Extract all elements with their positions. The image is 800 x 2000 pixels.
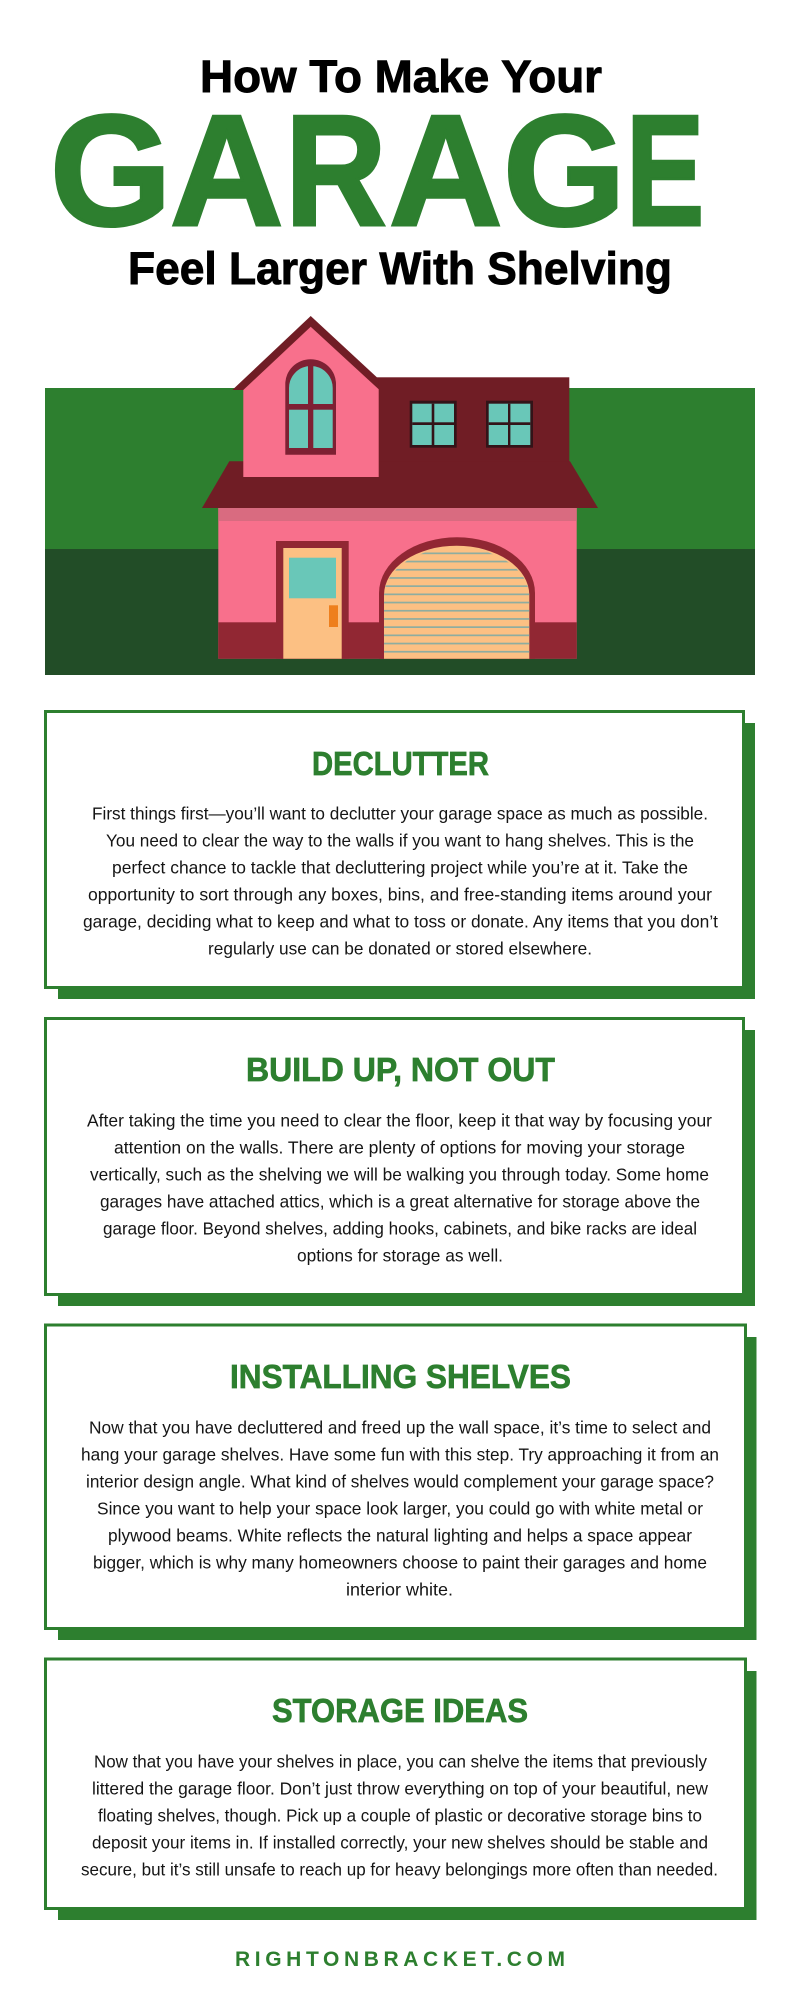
text block: declutter: First things first—you’ll want to declutter your garage space as much as possible. <box>92 803 708 823</box>
icon: dormer window right <box>486 401 533 448</box>
panel: storage ideas <box>46 1659 756 1920</box>
text block: build up, not out: options for storage as well. <box>297 1245 503 1265</box>
text block: storage ideas: secure, but it’s still unsafe to reach up for heavy belongings more often than needed. <box>81 1859 718 1879</box>
title word: GARAGE: R <box>285 83 387 259</box>
upper gable <box>232 316 379 477</box>
text block: storage ideas: Now that you have your shelves in place, you can shelve the items that previously <box>94 1751 707 1771</box>
background: green wall <box>45 388 755 549</box>
text block: declutter: regularly use can be donated or stored elsewhere. <box>208 938 592 958</box>
text block: storage ideas: floating shelves, though. Pick up a couple of plastic or decorative storage bins to <box>98 1805 702 1825</box>
heading: build up, not out: BUILD UP, NOT OUT <box>246 1051 555 1088</box>
text block: installing shelves <box>81 1417 719 1599</box>
heading: declutter: DECLUTTER <box>312 745 489 782</box>
text block: declutter <box>83 803 718 958</box>
page graphics <box>44 316 756 1966</box>
title <box>50 51 704 294</box>
title word: GARAGE <box>50 83 704 259</box>
title line: Feel Larger With Shelving: Feel Larger With Shelving <box>128 243 672 294</box>
text block: storage ideas: littered the garage floor. Don’t just throw everything on top of your beautiful, new <box>92 1778 708 1798</box>
title line: How To Make Your: How To Make Your <box>200 51 602 102</box>
title word: GARAGE: E <box>626 83 704 259</box>
text block: installing shelves: bigger, which is why many homeowners choose to paint their garages and home <box>93 1552 707 1572</box>
text block: installing shelves: interior design angle. What kind of shelves would complement your garage space? <box>86 1471 714 1491</box>
text block: declutter: garage, deciding what to keep and what to toss or donate. Any items that you don’t <box>83 911 718 931</box>
icon: dormer window left <box>410 401 457 448</box>
text block: installing shelves: hang your garage shelves. Have some fun with this step. Try approaching it from an <box>81 1444 719 1464</box>
main roof <box>202 377 598 508</box>
icon: garage door <box>379 537 535 659</box>
background: dark ground <box>45 549 755 675</box>
panel: declutter <box>46 712 755 999</box>
title word: GARAGE: A <box>389 83 503 259</box>
text block: declutter: You need to clear the way to the walls if you want to hang shelves. This is the <box>106 830 694 850</box>
text block: installing shelves: plywood beams. White reflects the natural lighting and helps a space appear <box>108 1525 692 1545</box>
text block: installing shelves: Since you want to help your space look larger, you could go with white metal or <box>97 1498 703 1518</box>
footer: website: RIGHTONBRACKET.COM <box>235 1948 565 1971</box>
text block: build up, not out <box>87 1110 712 1265</box>
text block: declutter: perfect chance to tackle that decluttering project while you’re at it. Take the <box>112 857 688 877</box>
house wall <box>218 508 577 659</box>
text block: installing shelves: interior white. <box>346 1579 453 1599</box>
title word: GARAGE: A <box>170 83 283 259</box>
text block: declutter: opportunity to sort through any boxes, bins, and free-standing items around your <box>88 884 712 904</box>
heading: installing shelves: INSTALLING SHELVES <box>230 1358 571 1395</box>
title word: GARAGE: G <box>50 83 171 259</box>
icon: arched window <box>285 359 336 455</box>
text block: build up, not out: garage floor. Beyond shelves, adding hooks, cabinets, and bike racks are ideal <box>103 1218 697 1238</box>
icon: front door <box>276 541 349 659</box>
hero illustration: house on green background <box>45 316 755 675</box>
text block: storage ideas <box>81 1751 718 1879</box>
panel: installing shelves <box>46 1325 756 1640</box>
text block: storage ideas: deposit your items in. If installed correctly, your new shelves should be stable and <box>92 1832 708 1852</box>
text block: build up, not out: attention on the walls. There are plenty of options for moving your storage <box>114 1137 685 1157</box>
text block: installing shelves: Now that you have decluttered and freed up the wall space, it’s time to select and <box>89 1417 711 1437</box>
title word: GARAGE: G <box>502 83 625 259</box>
text block: build up, not out: After taking the time you need to clear the floor, keep it that way by focusing your <box>87 1110 712 1130</box>
panel: build up, not out <box>46 1018 755 1306</box>
heading: storage ideas: STORAGE IDEAS <box>272 1692 528 1729</box>
text block: build up, not out: garages have attached attics, which is a great alternative for storage above the <box>100 1191 700 1211</box>
text block: build up, not out: vertically, such as the shelving we will be walking you through today. Some home <box>90 1164 709 1184</box>
